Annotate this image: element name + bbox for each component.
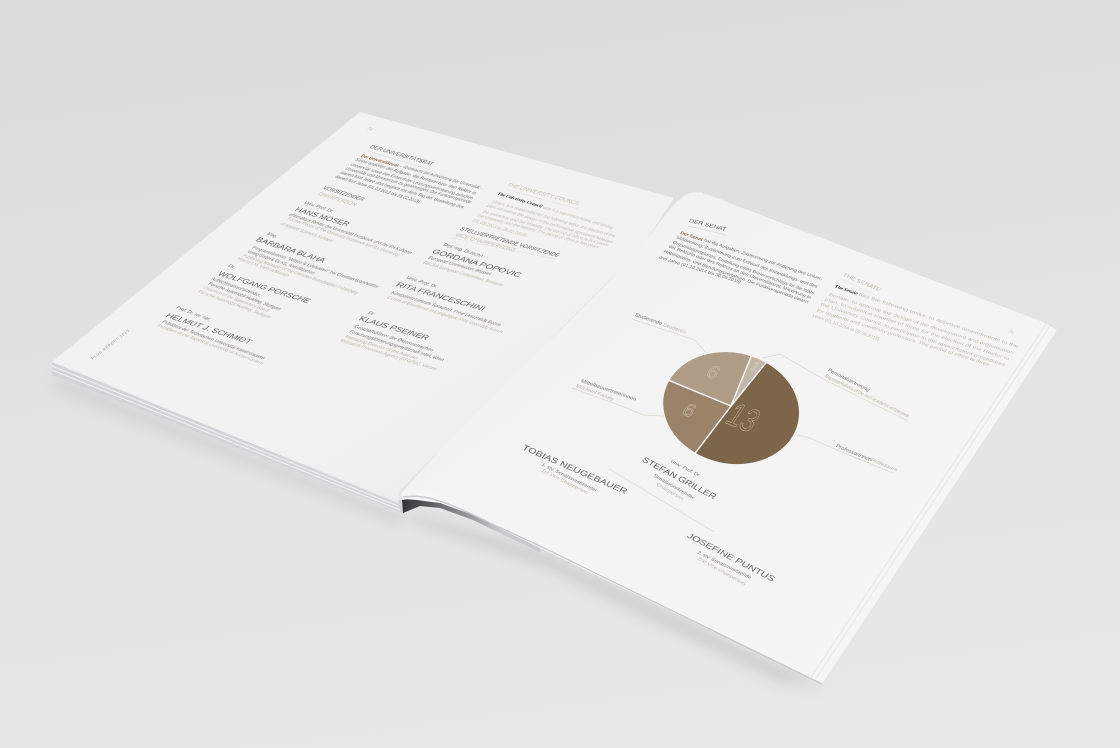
slice: 13 professors	[695, 362, 800, 465]
person: Wolfgang Porsche: WOLFGANG PORSCHE	[215, 270, 313, 305]
heading: The Senate: THE SENATE	[841, 273, 882, 293]
pie value labels: 1	[747, 358, 764, 375]
text block: University Council description: others, it is responsible for the following tasks: the election of the	[490, 199, 617, 239]
person: Helmut J. Schmidt: Präsident der Technischen Universität Kaiserslautern	[160, 320, 267, 361]
person: Barbara Blaha: Mag.	[265, 232, 279, 239]
text block: University Council description: the University and the Ministry. The period of office is five years	[475, 213, 601, 250]
person: Helmut J. Schmidt	[155, 306, 267, 366]
person: Rita Franceschini: RITA FRANCESCHINI	[394, 281, 488, 312]
person: Gordana Popovic	[421, 242, 525, 288]
person: Rita Franceschini: Centre of Excellence in Languages, Free University Bozen	[385, 295, 505, 335]
text block: Senate description: plan, to submit a shortlist of three for the election of the Rector to	[824, 297, 1012, 361]
slice: 1 staff	[731, 356, 766, 406]
person: Hans Moser: of Applied Sciences Kufstein	[278, 222, 335, 244]
person: Barbara Blaha: Programmleiterin, "Wilson & Edelsaiten" bei Christian Brandstätter	[250, 245, 381, 290]
person: Tobias Neugebauer: TOBIAS NEUGEBAUER	[520, 443, 629, 496]
person: Barbara Blaha: Publishing Manager of the Christian Brandstätter Publishing	[240, 254, 360, 296]
text block: Senat description: der Rektorin oder des Rektors an den Universitätsrat, Mitwirkung in	[668, 244, 813, 300]
left page content	[91, 126, 617, 372]
text block: Senate description: the University Council, to participate in the appointment procedures	[820, 302, 1008, 367]
connector: Personalvertretung	[763, 354, 911, 421]
person: Barbara Blaha: House Ltd, Vienna/Munich	[235, 257, 291, 278]
person: Rita Franceschini: Univ.-Prof. Dr.	[404, 275, 439, 289]
person: Klaus Pseiner: Dr.	[366, 310, 376, 317]
person: Wolfgang Porsche: Porsche Automobil Holding, Stuttgart	[196, 290, 273, 320]
person: Klaus Pseiner	[338, 310, 446, 372]
right page	[401, 193, 1043, 672]
person: Josefine Puntus: JOSEFINE PUNTUS	[685, 531, 778, 584]
slice: 6 students	[669, 351, 752, 406]
person: Klaus Pseiner: Geschäftsführer der Österreichischen	[352, 324, 436, 353]
left page	[52, 112, 674, 503]
text block: University Council description: plan, as well as the design of the performance agreement between	[485, 203, 615, 245]
text block: University Council description: acts in a supervisory board, and among	[541, 205, 615, 230]
text block: Senate description: Senate, to approve the design of the development and organisation	[828, 292, 1016, 355]
person: Hans Moser: ehemaliger Rektor der Universität Innsbruck und der FH Kufstein	[287, 212, 414, 256]
footer: report label: PLUS REPORT 2015	[91, 328, 130, 361]
text block: Senate description: has the following tasks: to approve amendments to the	[858, 292, 1021, 349]
text block: Universitätsrat description: Der Universitätsrat – überwacht die Aufsichtsrat der Universität -	[359, 153, 485, 191]
person: Barbara Blaha: BARBARA BLAHA	[253, 236, 329, 264]
heading: chairperson	[316, 186, 366, 208]
heading: The Senate	[841, 273, 882, 296]
person: Josefine Puntus: 2. stv. Senatsvorsitzende	[696, 550, 753, 580]
person: Helmut J. Schmidt: President of the Technical University of Kaiserslautern	[155, 324, 265, 366]
text block: Universitätsrat description: dauert fünf Jahre und beginnt mit dem Tag der Bestellung des	[338, 170, 466, 210]
pie chart: senate composition	[663, 351, 800, 465]
text block: Universitätsrat description: dauert fünf Jahre (01.03.2013 bis 28.02.2018).	[333, 174, 423, 205]
connector: Mittelbau	[572, 378, 664, 416]
connector: Studierende: Students	[661, 322, 688, 336]
pie value labels: 6	[678, 400, 700, 422]
person: Josefine Puntus	[685, 531, 778, 586]
person: Stefan Griller: Senatsvorsitzender	[652, 473, 696, 500]
text block: University Council description	[470, 192, 617, 250]
person: Tobias Neugebauer: 1. stv. Senatsvorsitzender	[540, 462, 599, 493]
pie value labels: 13	[719, 397, 767, 439]
heading: The University Council: THE UNIVERSITY COUNCIL	[505, 183, 582, 207]
text block: Universitätsrat description: Seine anderen die Aufgabe, die Rektorin bzw. den Rektor in	[353, 157, 478, 196]
text block: Senat description: Habilitations- und Berufungsverfahren. Die Funktionsperiode dauert	[663, 249, 810, 305]
connector: chair line	[609, 469, 714, 532]
person: Helmut J. Schmidt: HELMUT J. SCHMIDT	[163, 312, 255, 346]
heading: chairperson: VORSITZENDER	[321, 186, 366, 202]
text block: Senat description: sitätsleitung, Zustimmung zum Entwurf des Entwicklungs- und des	[676, 235, 820, 289]
person: Hans Moser: Former Rector of the University Innsbruck and the University	[285, 217, 401, 258]
heading: vice chairpersons: VICE CHAIRPERSONS	[453, 233, 517, 253]
text block: Universitätsrat description	[333, 153, 485, 210]
person: Stefan Griller: Univ.-Prof. Dr.	[669, 459, 702, 478]
pie value labels: 6	[702, 362, 724, 384]
text block: University Council description: The University Council	[495, 192, 544, 209]
right page stack	[401, 192, 1057, 684]
gutter shadow wedge	[402, 498, 540, 552]
person: Klaus Pseiner: Forschungsförderungsgesellschaft mbH, Wien	[347, 329, 446, 363]
connector: Mittelbau: Mittelbauvertreterinnen	[579, 378, 638, 403]
heading: Der Senat: DER SENAT	[688, 218, 728, 233]
text block: Senat description: Organisationsplanes, Erstellung eines Dreiervorschlags für die Wahl	[672, 240, 815, 295]
right page content	[520, 218, 1021, 586]
text block: Senate description: The Senate	[834, 284, 859, 296]
person: Klaus Pseiner: Managing Director of the Austrian	[343, 334, 420, 361]
slice: 6 mid-level faculty	[663, 380, 731, 453]
person: Rita Franceschini: Kompetenzzentrum Sprachen, Freie Universität Bozen	[389, 290, 503, 328]
text block: University Council description: the university and the Ministry. The period of office is five years	[480, 209, 611, 248]
person: Tobias Neugebauer	[520, 443, 629, 496]
connector: Personalvertretung: Personalvertretung	[826, 368, 871, 393]
person: Rita Franceschini	[385, 275, 505, 335]
person: Wolfgang Porsche: Dr.	[226, 264, 237, 270]
text block: Senate description	[812, 284, 1021, 367]
page number 75: 75	[1008, 329, 1015, 335]
person: Hans Moser: HANS MOSER	[293, 206, 353, 228]
person: Hans Moser: Univ.-Prof. Dr.	[302, 200, 335, 214]
connector: Professorinnen: Professors	[869, 457, 899, 473]
person: Wolfgang Porsche: Aufsichtsratsvorsitzender,	[209, 277, 263, 298]
connector: Studierende	[632, 312, 705, 352]
person: Klaus Pseiner: KLAUS PSEINER	[357, 315, 432, 342]
text block: Universitätsrat description: Universität und Ministerium zu genehmigen. Die Funktionsperiode	[343, 166, 473, 205]
text block: Senate description: years (01.10.2014 to 30.09.2015).	[812, 313, 882, 342]
person: Gordana Popovic: DECEA European Commission, Brussels	[421, 260, 505, 288]
person: Helmut J. Schmidt: Prof. Dr. rer. nat.	[174, 306, 213, 322]
connector: Mittelbau: Mid-level Faculty	[574, 383, 616, 402]
connector: Professorinnen: Professorinnen	[834, 443, 873, 463]
person: Stefan Griller: STEFAN GRILLER	[640, 456, 719, 501]
text block: Senate description: for Students and university professors. The period of office is three	[816, 308, 991, 367]
connector: Personalvertretung: Representatives of the non-academic employees	[823, 374, 911, 419]
pie value labels	[678, 358, 767, 439]
left page stack	[52, 362, 410, 513]
person: Tobias Neugebauer: 1st Vice Chairperson	[540, 468, 590, 495]
text block: Senat description: drei Jahre (01.10.2014 bis 30.09.2015).	[658, 255, 743, 285]
text block: Universitätsrat description: Universität sowie den Entwurf der Leistungsvereinbarung zwischen	[348, 162, 475, 201]
person: Wolfgang Porsche	[196, 264, 313, 320]
book shadow	[52, 376, 822, 686]
person: Gordana Popovic: Dipl.-Ing. Dr.techn.	[441, 242, 486, 259]
person: Gordana Popovic: European Commission, Brussel	[426, 255, 492, 277]
person: Gordana Popovic: GORDANA POPOVIC	[430, 248, 525, 279]
heading: vice chairpersons: STELLVERTRETENDE VORSITZENDE	[458, 227, 561, 259]
page number 74: 74	[365, 126, 375, 132]
connector: Studierende: Studierende	[633, 312, 663, 327]
person: Barbara Blaha	[235, 232, 381, 296]
person: Klaus Pseiner: Research Promotion Agency (FFG/SA), Vienna	[338, 338, 439, 372]
heading: chairperson: CHAIRPERSON	[316, 192, 358, 208]
text block: University Council description: (01.03.2013 to 28.02.2018).	[470, 218, 529, 239]
person: Wolfgang Porsche: Porsche Automobil Holding, Stuttgart	[206, 282, 283, 312]
person: Stefan Griller: Chairperson	[655, 482, 685, 501]
heading: Der Senat	[688, 218, 728, 235]
person: Josefine Puntus: 2nd Vice Chairperson	[696, 556, 747, 586]
person: Wolfgang Porsche: Chairman of the Supervisory Board,	[201, 286, 272, 314]
heading: Der Universitätsrat: DER UNIVERSITÄTSRAT	[368, 144, 436, 167]
connector: Professorinnen	[797, 435, 899, 473]
text block: Senat description	[658, 229, 825, 305]
text block: Senat description: Der Senat hat die Aufgaben: Zustimmung zur Änderung des Univer-	[680, 229, 825, 281]
person: Barbara Blaha: Verlag GmbH & Co KG, Wien/München	[245, 250, 316, 276]
